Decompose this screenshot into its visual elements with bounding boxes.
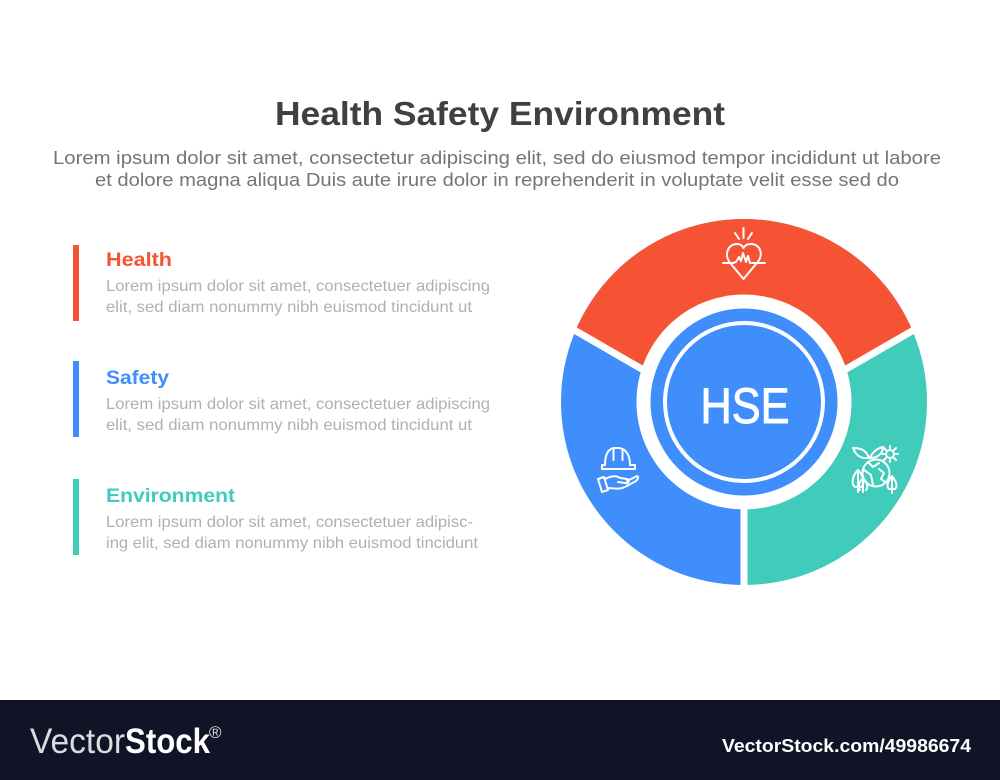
segment: safety	[561, 219, 743, 585]
icon: globe with leaves, trees and sun	[853, 446, 898, 493]
panel: health item	[73, 245, 490, 321]
safety description: Lorem ipsum dolor sit amet, consectetuer adipiscing	[106, 396, 490, 413]
health description: elit, sed diam nonummy nibh euismod tincidunt ut	[106, 299, 473, 316]
safety accent bar	[73, 361, 79, 437]
donut chart	[486, 219, 927, 585]
subtitle text	[53, 147, 941, 190]
panel: environment item	[73, 479, 479, 555]
health description	[106, 278, 490, 316]
health heading: Health	[106, 250, 172, 271]
safety description	[106, 396, 490, 434]
icon: helmet on hand	[598, 448, 638, 492]
health accent bar	[73, 245, 79, 321]
health description: Lorem ipsum dolor sit amet, consectetuer adipiscing	[106, 278, 490, 295]
footer image id: VectorStock.com/49986674	[722, 736, 971, 756]
title: Health Safety Environment	[275, 95, 725, 132]
environment description: ing elit, sed diam nonummy nibh euismod tincidunt	[106, 535, 479, 552]
panel: safety item	[73, 361, 490, 437]
centre white disc	[636, 294, 852, 510]
icon: heart with pulse	[723, 228, 765, 279]
footer logo	[30, 722, 222, 761]
subtitle text: et dolore magna aliqua Duis aute irure dolor in reprehenderit in voluptate velit esse sed do	[95, 169, 899, 190]
footer logo: ®	[209, 723, 222, 742]
footer logo: Stock	[125, 722, 210, 761]
segment gaps	[488, 280, 1000, 600]
environment accent bar	[73, 479, 79, 555]
footer band	[0, 700, 1000, 780]
environment description: Lorem ipsum dolor sit amet, consectetuer adipisc-	[106, 514, 473, 531]
centre blue badge	[650, 308, 838, 496]
environment description	[106, 514, 479, 552]
footer logo: Vector	[30, 722, 125, 761]
environment heading: Environment	[106, 486, 236, 507]
segment: health	[577, 219, 911, 366]
centre label: HSE	[700, 378, 790, 434]
subtitle text: Lorem ipsum dolor sit amet, consectetur adipiscing elit, sed do eiusmod tempor incididunt ut labore	[53, 147, 941, 168]
safety heading: Safety	[106, 368, 169, 389]
safety description: elit, sed diam nonummy nibh euismod tincidunt ut	[106, 417, 473, 434]
segment: environment	[745, 219, 927, 585]
